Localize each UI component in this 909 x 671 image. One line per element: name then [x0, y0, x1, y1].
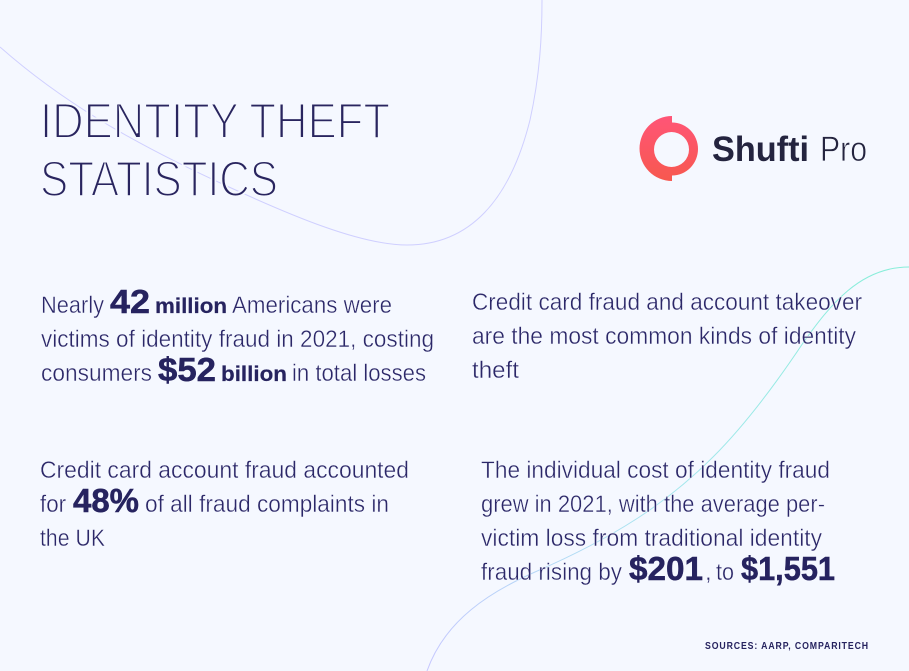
title [40, 93, 390, 207]
logo wordmark: Pro [820, 130, 867, 169]
decorative curve: purple [0, 0, 542, 245]
text block: UK 48%: the UK [40, 525, 105, 552]
text block: individual cost: to [716, 559, 734, 586]
icon: ring [640, 116, 698, 181]
text block: individual cost: , [705, 559, 712, 586]
text block: 42 million victims: 42 [110, 283, 150, 320]
text block: UK 48%: 48% [73, 482, 139, 519]
text block: individual cost: grew in 2021, with the average per- [481, 491, 825, 518]
text block: individual cost: victim loss from traditional identity [481, 525, 822, 552]
text block: individual cost: $1,551 [741, 550, 835, 587]
text block: individual cost: The individual cost of identity fraud [481, 457, 830, 484]
logo wordmark: Shufti [712, 130, 809, 169]
text block: 42 million victims: $52 [158, 351, 216, 388]
logo wordmark [712, 130, 867, 169]
text block: 42 million victims: Nearly [41, 292, 104, 319]
decorative curve: teal to purple [427, 267, 909, 671]
sources: SOURCES: AARP, COMPARITECH [705, 641, 869, 652]
text block: most common kinds: Credit card fraud and account takeover [472, 289, 862, 316]
text block: 42 million victims: billion [221, 363, 287, 386]
text block: UK 48%: Credit card account fraud accounted [40, 457, 409, 484]
text block: 42 million victims: victims of identity fraud in 2021, costing [41, 326, 434, 353]
text block: most common kinds: theft [472, 357, 519, 384]
logo: Shufti Pro [640, 116, 867, 181]
text block: individual cost: $201 [629, 550, 703, 587]
text block: UK 48%: for [40, 491, 66, 518]
text block: UK 48%: of all fraud complaints in [145, 491, 389, 518]
text block: UK 48% [40, 457, 409, 552]
text block: individual cost: fraud rising by [481, 559, 622, 586]
title: IDENTITY THEFT [40, 93, 390, 149]
text block: 42 million victims [41, 283, 434, 388]
text block: 42 million victims: in total losses [292, 360, 426, 387]
text block: 42 million victims: million [155, 295, 227, 318]
title: STATISTICS [40, 151, 278, 207]
text block: 42 million victims: Americans were [232, 292, 392, 319]
text block: individual cost [481, 457, 835, 587]
text block: most common kinds [472, 289, 862, 384]
text block: 42 million victims: consumers [41, 360, 152, 387]
text block: most common kinds: are the most common kinds of identity [472, 323, 856, 350]
